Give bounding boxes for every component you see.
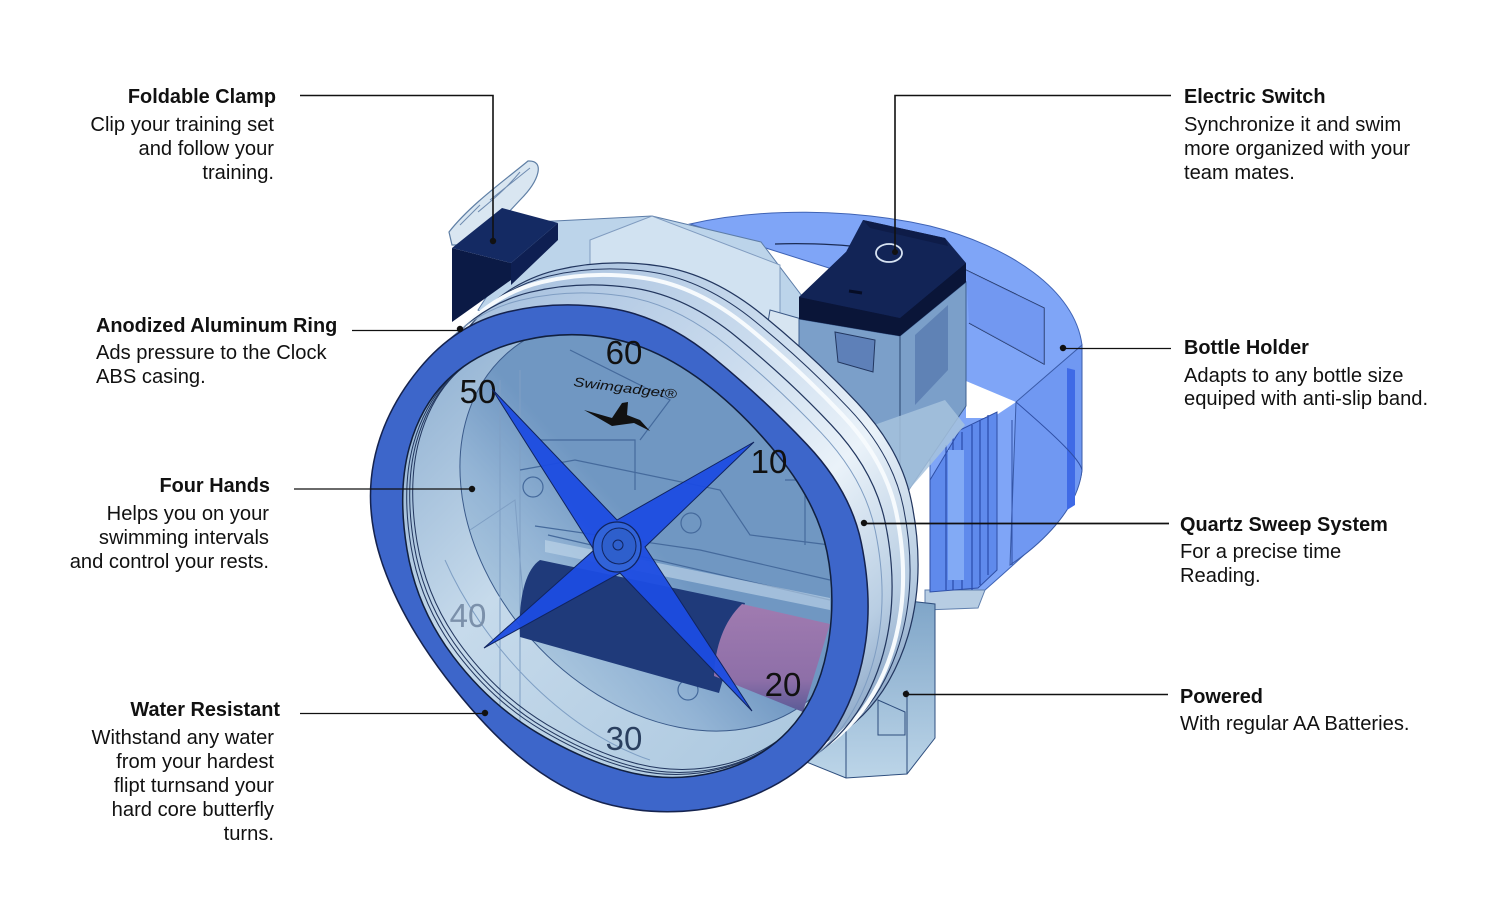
label: Foldable Clamp [90, 86, 496, 244]
AA battery [520, 560, 745, 693]
label: Water Resistant: from your hardest [116, 751, 274, 773]
clock dial interior [406, 336, 832, 775]
label: Four Hands: and control your rests. [70, 551, 269, 573]
label: Quartz Sweep System: Reading. [1180, 565, 1261, 587]
electric switch housing [799, 220, 966, 513]
label: Bottle Holder: Bottle Holder [1184, 337, 1309, 359]
inner disc [459, 336, 832, 732]
watch illustration [370, 161, 1082, 812]
label: Water Resistant: turns. [224, 823, 274, 845]
label: Anodized Aluminum Ring: ABS casing. [96, 366, 206, 388]
dial numbers: 40 [450, 597, 486, 634]
dial numbers [450, 334, 801, 757]
label: Four Hands: Helps you on your [107, 503, 269, 525]
label: Electric Switch: more organized with your [1184, 138, 1410, 160]
label: Quartz Sweep System [861, 514, 1388, 587]
bottle holder strap [690, 212, 1082, 590]
label: Bottle Holder [1060, 337, 1428, 410]
label: Foldable Clamp: Clip your training set [90, 114, 274, 136]
label: Four Hands: Four Hands [159, 475, 270, 497]
faint crescent lines [445, 370, 650, 760]
label: Foldable Clamp: training. [202, 162, 274, 184]
foldable clamp [449, 161, 558, 322]
switch cap [799, 220, 966, 336]
inner bezel edge [403, 335, 832, 778]
dial numbers: 20 [765, 666, 801, 703]
label: Foldable Clamp: Foldable Clamp [128, 86, 276, 108]
battery tray stripe [545, 540, 830, 610]
label: Quartz Sweep System: Quartz Sweep System [1180, 514, 1388, 536]
dial numbers: 60 [606, 334, 642, 371]
label: Anodized Aluminum Ring: Ads pressure to the Clock [96, 342, 328, 364]
strap buckle ribs [925, 412, 997, 610]
label: Electric Switch [892, 86, 1410, 255]
label: Quartz Sweep System: For a precise time [1180, 541, 1341, 563]
label: Anodized Aluminum Ring: Anodized Aluminum Ring [96, 315, 337, 337]
rear housing [478, 216, 880, 480]
label: Bottle Holder: equiped with anti-slip band. [1184, 388, 1428, 410]
dial numbers: 50 [460, 373, 496, 410]
dial numbers: 30 [606, 720, 642, 757]
Swimgadget logo [573, 374, 678, 431]
label: Water Resistant: Withstand any water [92, 727, 274, 749]
Swimgadget logo: Swimgadget® [573, 374, 678, 402]
label: Electric Switch: team mates. [1184, 162, 1295, 184]
battery end [714, 604, 830, 712]
label: Foldable Clamp: and follow your [139, 138, 274, 160]
label: Water Resistant: flipt turnsand your [114, 775, 274, 797]
label: Powered [903, 686, 1409, 735]
internal chassis [520, 350, 830, 700]
label: Electric Switch: Electric Switch [1184, 86, 1326, 108]
label: Water Resistant: hard core butterfly [112, 799, 275, 821]
center hub [593, 522, 641, 572]
four hands [484, 389, 754, 711]
label: Anodized Aluminum Ring [96, 315, 463, 388]
lower battery mount [804, 600, 935, 778]
dial numbers: 10 [751, 443, 787, 480]
label: Water Resistant [92, 699, 488, 845]
label: Powered: With regular AA Batteries. [1180, 713, 1409, 735]
label: Bottle Holder: Adapts to any bottle size [1184, 365, 1403, 387]
label: Water Resistant: Water Resistant [130, 699, 280, 721]
water resistant front bezel [370, 305, 868, 812]
aluminum ring side rim [384, 263, 918, 800]
label: Electric Switch: Synchronize it and swim [1184, 114, 1401, 136]
concentric glass edge lines [406, 366, 778, 775]
label: Powered: Powered [1180, 686, 1263, 708]
label: Four Hands [70, 475, 475, 573]
label: Four Hands: swimming intervals [99, 527, 269, 549]
